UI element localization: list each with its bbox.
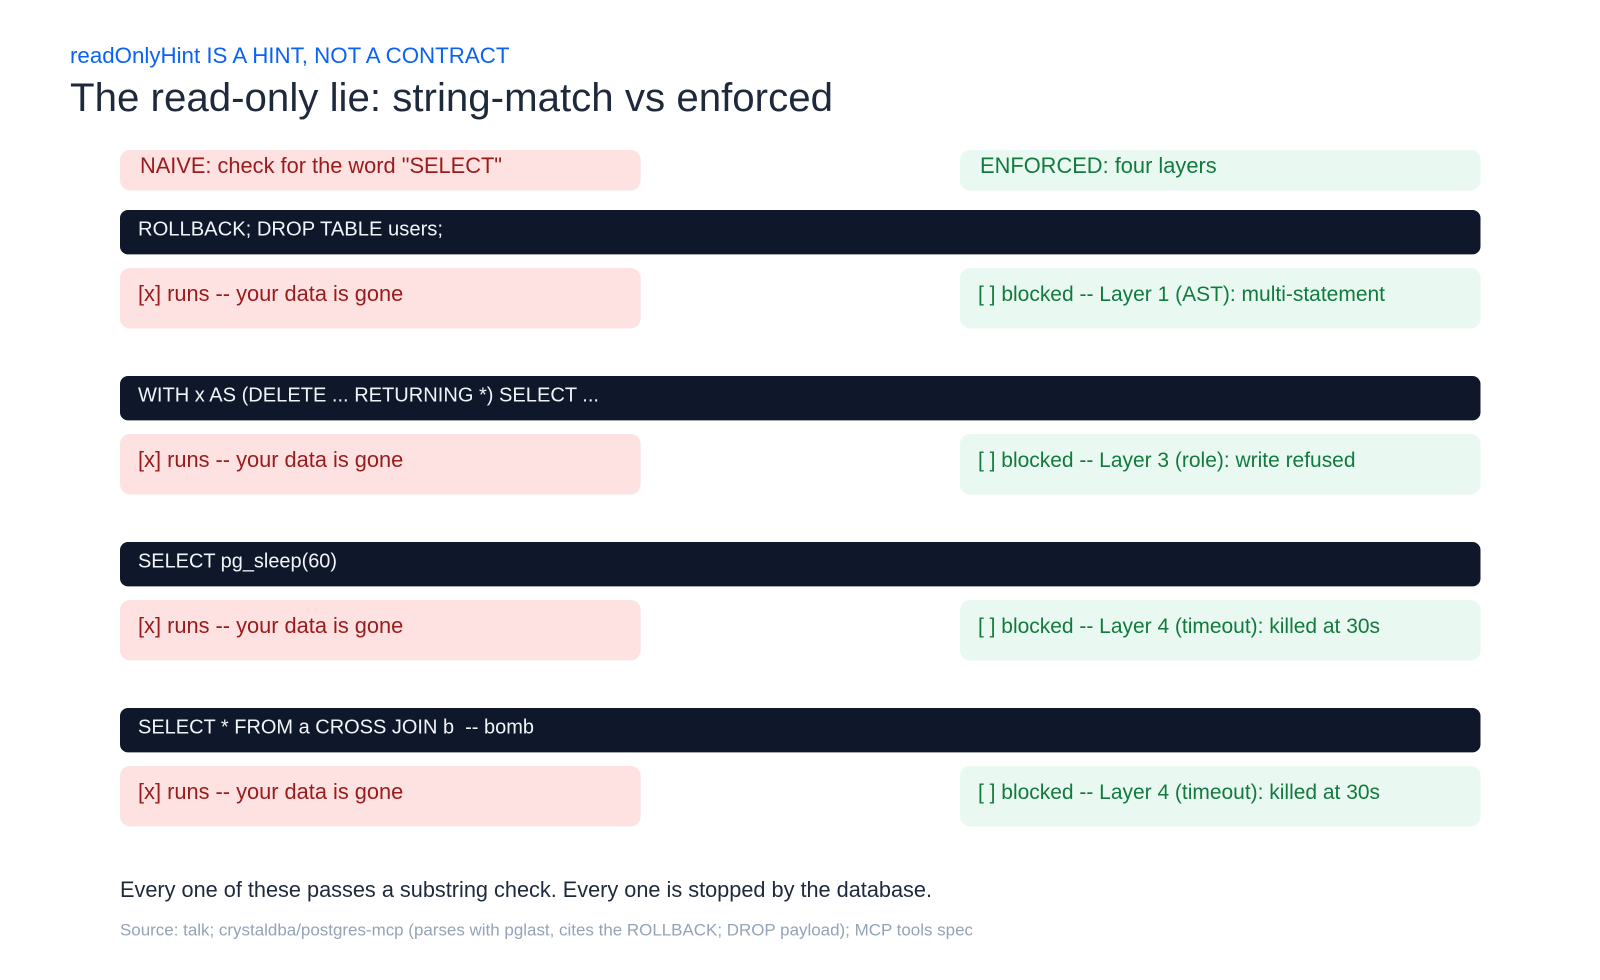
row 4 <box>120 708 1481 826</box>
enforced result 1: [ ] blocked -- Layer 1 (AST): multi-statement <box>978 283 1385 306</box>
naive result 1: [x] runs -- your data is gone <box>138 281 403 306</box>
enforced result 3 <box>960 600 1481 660</box>
naive result 1 <box>120 268 641 328</box>
panel: naive header <box>120 150 641 190</box>
eyebrow: readOnlyHint IS A HINT, NOT A CONTRACT <box>70 43 510 68</box>
row 3 <box>120 542 1481 660</box>
query bar 4: SELECT * FROM a CROSS JOIN b -- bomb <box>138 717 534 739</box>
enforced result 2: [ ] blocked -- Layer 3 (role): write refused <box>978 449 1356 472</box>
query bar 1: ROLLBACK; DROP TABLE users; <box>138 219 443 241</box>
query bar 3 <box>120 542 1480 586</box>
naive result 3 <box>120 600 641 660</box>
query bar 2: WITH x AS (DELETE ... RETURNING *) SELECT ... <box>138 385 599 407</box>
row 1 <box>120 210 1481 328</box>
row 2 <box>120 376 1481 494</box>
enforced result 4: [ ] blocked -- Layer 4 (timeout): killed at 30s <box>978 781 1380 804</box>
query bar 2 <box>120 376 1480 420</box>
naive result 2: [x] runs -- your data is gone <box>138 447 403 472</box>
panel: naive header: NAIVE: check for the word "SELECT" <box>140 153 502 178</box>
enforced result 3: [ ] blocked -- Layer 4 (timeout): killed at 30s <box>978 615 1380 638</box>
enforced result 4 <box>960 766 1481 826</box>
panel: enforced header: ENFORCED: four layers <box>980 153 1217 178</box>
enforced result 1 <box>960 268 1481 328</box>
query bar 4 <box>120 708 1480 752</box>
naive result 3: [x] runs -- your data is gone <box>138 613 403 638</box>
source note: Source: talk; crystaldba/postgres-mcp (parses with pglast, cites the ROLLBACK; DROP payload); MCP tools spec <box>120 920 973 940</box>
takeaway text: Every one of these passes a substring check. Every one is stopped by the database. <box>120 877 932 902</box>
panel: enforced header <box>960 150 1481 190</box>
enforced result 2 <box>960 434 1481 494</box>
query bar 3: SELECT pg_sleep(60) <box>138 551 337 573</box>
naive result 2 <box>120 434 641 494</box>
naive result 4 <box>120 766 641 826</box>
title: The read-only lie: string-match vs enforced <box>70 76 833 120</box>
naive result 4: [x] runs -- your data is gone <box>138 779 403 804</box>
query bar 1 <box>120 210 1480 254</box>
